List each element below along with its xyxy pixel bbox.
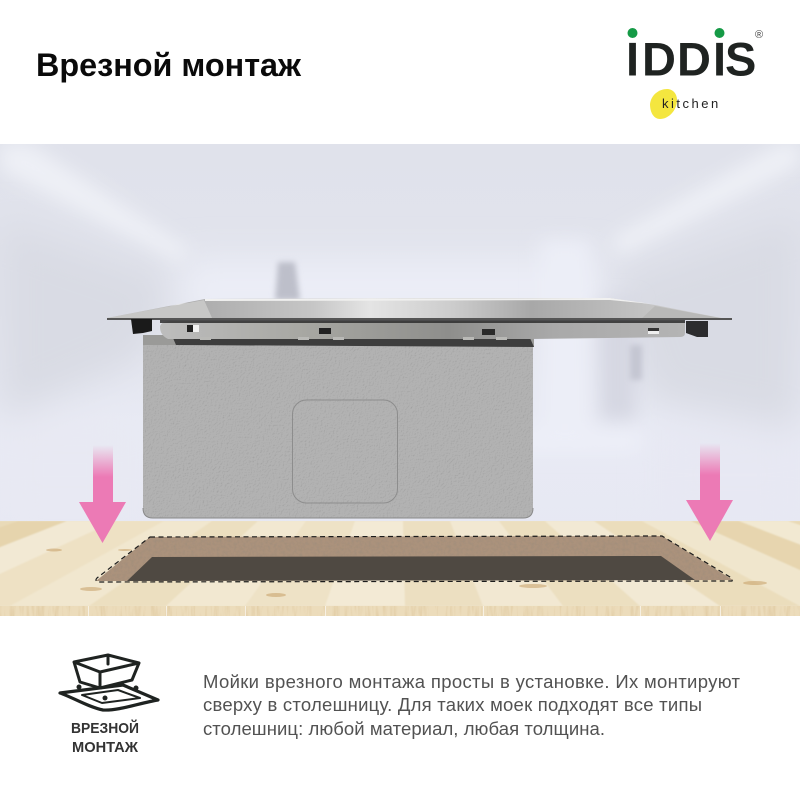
sink body shadow band: [143, 335, 534, 347]
blurred kitchen background: [0, 144, 800, 521]
icon caption: ВРЕЗНОЙ: [71, 719, 139, 737]
cutout dashed outline: [96, 536, 732, 582]
mounting bracket: [160, 321, 685, 339]
sink: [107, 298, 732, 518]
logo kitchen word: kitchen: [662, 96, 721, 111]
bracket tabs: [200, 337, 507, 340]
sink left flange highlight: [139, 300, 212, 318]
icon slab: [60, 685, 158, 710]
wood knots: [46, 548, 767, 597]
wooden countertop: [0, 521, 800, 616]
arrow right: [686, 443, 733, 541]
logo: IDDIS kitchen: [626, 28, 763, 119]
sink right flange highlight: [642, 306, 720, 318]
description text: столешниц: любой материал, любая толщина.: [203, 718, 605, 739]
icon drop arrows: [76, 684, 138, 700]
logo yellow blob: [650, 89, 677, 119]
icon slab hole: [82, 690, 140, 703]
icon caption: МОНТАЖ: [72, 739, 138, 756]
sink top bowl: [113, 298, 715, 318]
icon box: [74, 655, 139, 688]
description text: сверху в столешницу. Для таких моек подходят все типы: [203, 694, 702, 715]
cutout dark opening: [127, 556, 695, 581]
sink body: [143, 345, 533, 518]
bracket top dark line: [160, 320, 685, 323]
bracket slots: [187, 325, 659, 335]
wood planks: [0, 521, 800, 606]
icon caption: [71, 719, 139, 756]
countertop front edge: [0, 606, 800, 616]
logo wordmark: IDDIS: [626, 32, 756, 86]
sink top edge highlight: [205, 298, 652, 304]
logo green dot right: [714, 28, 724, 38]
photo panel: kitchen background with sink and countertop: [0, 144, 800, 616]
arrow left: [79, 445, 126, 543]
sink rim line: [107, 318, 732, 320]
logo registered mark: ®: [755, 29, 763, 41]
overflow panel: [292, 400, 398, 503]
description text: Мойки врезного монтажа просты в установке. Их монтируют: [203, 671, 741, 692]
cutout chipboard side: [96, 536, 733, 581]
title: Врезной монтаж: [36, 47, 302, 83]
sink dark band under bracket: [174, 339, 534, 347]
right mounting clip: [686, 321, 708, 337]
description text: [203, 671, 741, 739]
countertop cutout: [96, 536, 733, 582]
logo green dot left: [628, 28, 638, 38]
icon: flush mount sink: [60, 655, 158, 710]
left mounting clip: [131, 319, 152, 334]
sink body bottom edge: [143, 508, 533, 518]
